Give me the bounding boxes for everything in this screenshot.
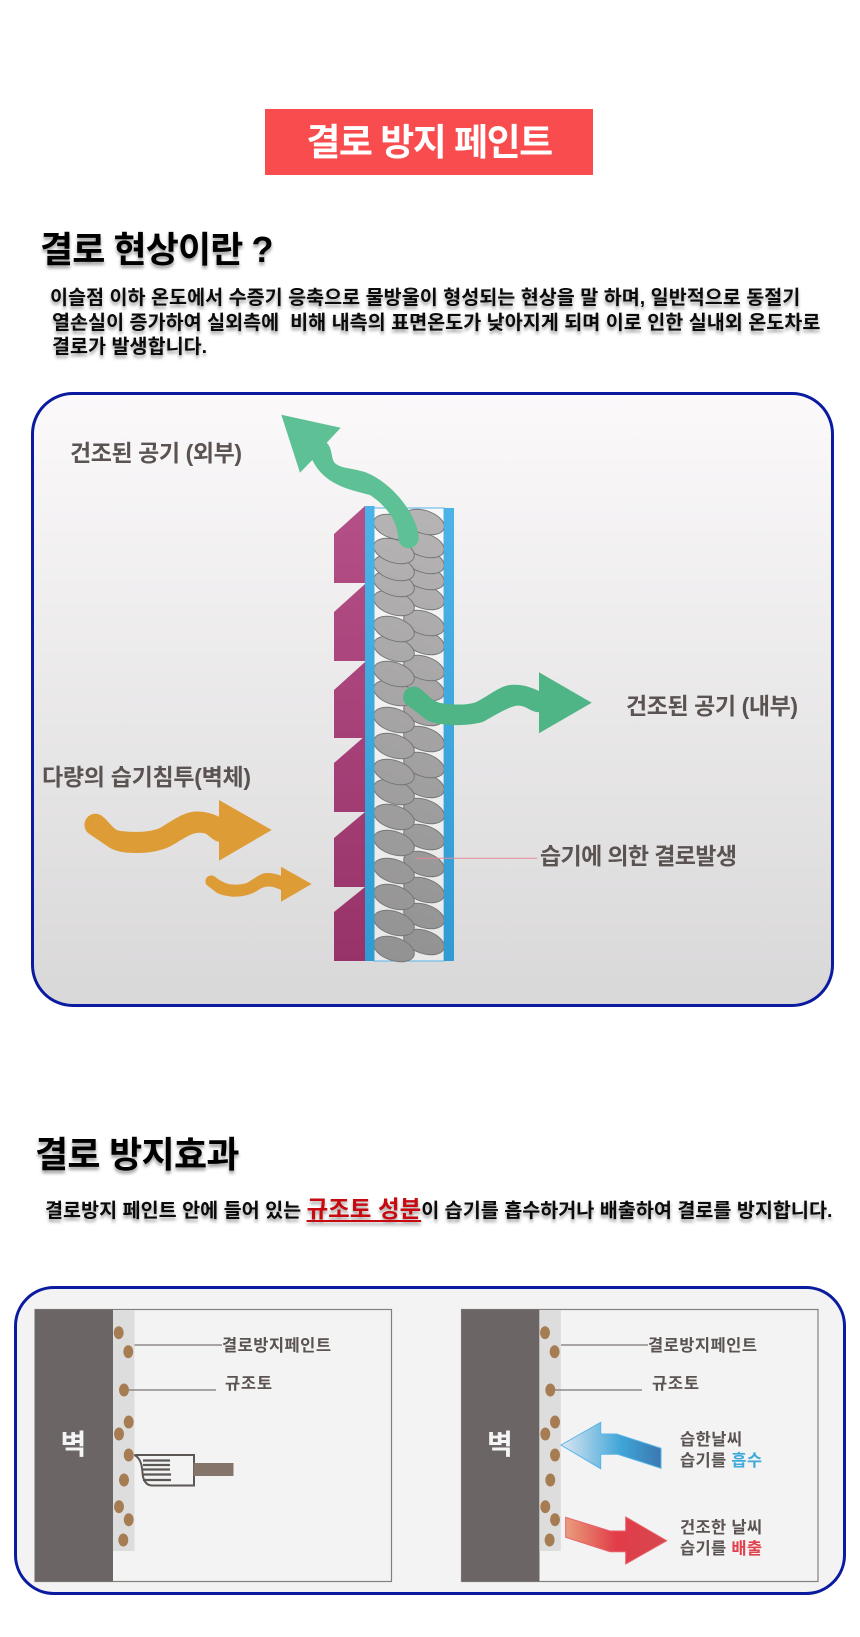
text block: condensation explanation: 이슬점 이하 온도에서 수증기 응축으로 물방울이 형성되는 현상을 말 하며, 일반적으로 동절기: [50, 287, 800, 309]
diagram: absorbing and releasing moisture: [462, 1310, 818, 1582]
leader lines: [129, 1345, 222, 1390]
diagram frame: [462, 1310, 818, 1582]
arrow: dry air moving inside: [403, 672, 592, 733]
panel: condensation diagram: [31, 392, 834, 1007]
label: diatomite: 규조토: [225, 1375, 272, 1393]
heading: prevention effect: 결로 방지효과: [35, 1134, 239, 1175]
text block: condensation explanation: 결로가 발생합니다.: [52, 336, 207, 358]
arrow: large moisture flow: [84, 800, 272, 861]
wall: 벽: [60, 1429, 86, 1460]
diagram: painting the wall: [35, 1310, 392, 1582]
leader line to condensation: [415, 857, 537, 859]
text block: diatomite explanation: 결로방지 페인트 안에 들어 있는 규조토 성분이 습기를 흡수하거나 배출하여 결로를 방지합니다.: [45, 1196, 832, 1222]
label: dry weather releases moisture: 건조한 날씨: [680, 1518, 762, 1537]
diatomite particles: [114, 1326, 134, 1546]
wall: 벽: [487, 1429, 513, 1460]
panel: prevention diagrams: [14, 1286, 846, 1595]
label: moisture penetration through wall: 다량의 습기침투(벽체): [42, 764, 251, 790]
arrow: moisture released: [566, 1517, 667, 1564]
label: dry air outside: 건조된 공기 (외부): [70, 440, 242, 466]
insulation layer with cells: [370, 505, 448, 966]
wall: [35, 1310, 113, 1582]
text block: condensation explanation: [50, 287, 821, 360]
wall: [462, 1310, 540, 1582]
title banner: [265, 109, 593, 175]
label: dry weather releases moisture: [680, 1518, 762, 1558]
title banner: 결로 방지 페인트: [306, 122, 552, 163]
label: dry air inside: 건조된 공기 (내부): [626, 693, 798, 719]
arrow: small moisture flow: [205, 867, 312, 902]
leader lines: [555, 1345, 648, 1390]
paint layer: [539, 1310, 561, 1551]
heading: what is condensation: 결로 현상이란 ?: [40, 229, 273, 270]
text block: condensation explanation: 열손실이 증가하여 실외측에 비해 내측의 표면온도가 낮아지게 되며 이로 인한 실내외 온도차로: [52, 312, 820, 334]
label: humid weather absorbs moisture: 습한날씨: [680, 1430, 742, 1449]
label: humid weather absorbs moisture: [680, 1430, 762, 1470]
blue wall layers: [365, 506, 454, 961]
arrow: dry air moving up and out: [281, 415, 419, 548]
label: diatomite: 규조토: [652, 1375, 699, 1393]
label: dry weather releases moisture: 습기를 배출: [680, 1539, 762, 1558]
label: anti-condensation paint: 결로방지페인트: [648, 1336, 757, 1355]
arrow: moisture absorbed: [561, 1422, 661, 1469]
diatomite particles: [540, 1326, 560, 1546]
label: condensation occurs: 습기에 의한 결로발생: [540, 843, 737, 869]
outer wall blocks: [334, 506, 365, 961]
label: anti-condensation paint: 결로방지페인트: [222, 1336, 331, 1355]
label: humid weather absorbs moisture: 습기를 흡수: [680, 1451, 762, 1470]
icon: paint brush: [134, 1455, 234, 1486]
paint layer: [113, 1310, 134, 1551]
diagram frame: [35, 1310, 392, 1582]
